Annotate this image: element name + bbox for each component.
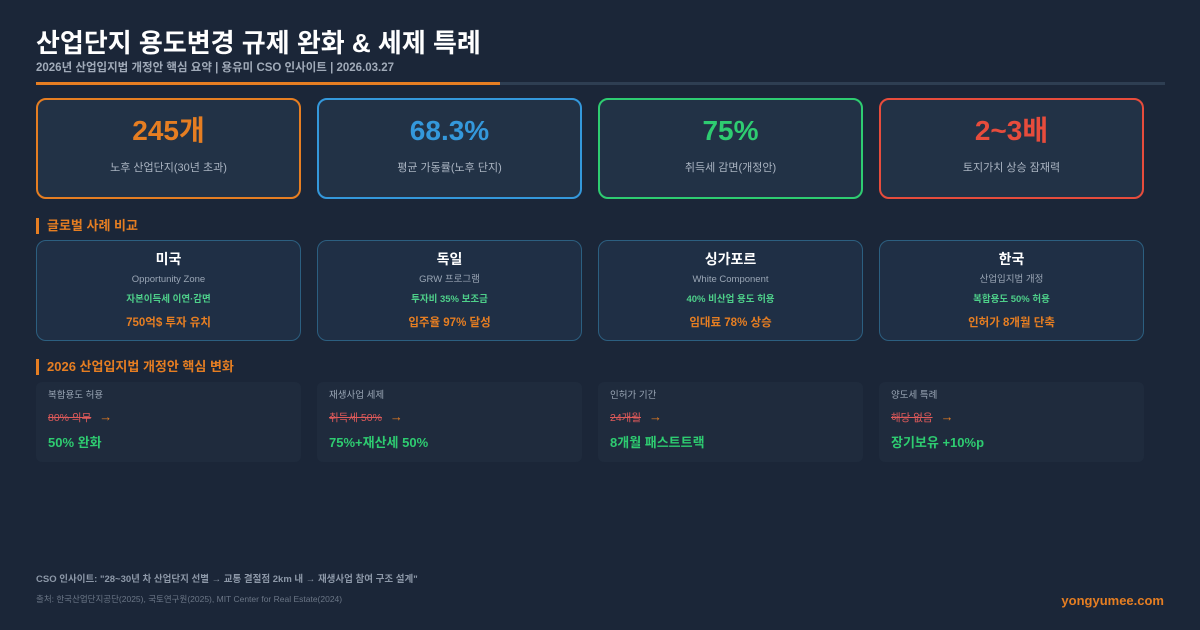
change 3: 24개월 → <box>610 409 662 424</box>
stat: 75: 취득세 감면(개정안) <box>685 162 776 174</box>
stat: 245 <box>36 98 301 199</box>
stat: 245: 245개 <box>132 115 205 146</box>
stat: 2~3: 토지가치 상승 잠재력 <box>963 162 1060 174</box>
heading: changes: 2026 산업입지법 개정안 핵심 변화 <box>47 359 234 374</box>
stat: 68.3: 평균 가동률(노후 단지) <box>397 162 502 174</box>
change 2 <box>317 382 582 462</box>
panel: Korea: 한국 <box>999 251 1024 267</box>
brand: yongyumee.com <box>1061 593 1164 608</box>
change 3 <box>598 382 863 462</box>
change 4: 해당 없음 → <box>891 409 954 424</box>
change 3: 인허가 기간 <box>610 390 656 401</box>
panel: Singapore: 40% 비산업 용도 허용 <box>686 294 775 305</box>
insight: CSO 인사이트: "28~30년 차 산업단지 선별 → 교통 결절점 2km 내 → 재생사업 참여 구조 설계" <box>36 574 418 585</box>
change 3: 8개월 패스트트랙 <box>610 435 705 450</box>
change 1 <box>36 382 301 462</box>
panel: Singapore <box>598 240 863 341</box>
panel: Korea: 산업입지법 개정 <box>980 274 1043 285</box>
change 1: 80% 의무 → <box>48 409 112 424</box>
stat: 68.3: 68.3% <box>410 115 489 146</box>
stat: 75: 75% <box>702 115 759 146</box>
panel: Germany: GRW 프로그램 <box>419 274 480 285</box>
change 2: 75%+재산세 50% <box>329 435 428 450</box>
stat: 2~3 <box>879 98 1144 199</box>
change 4: 양도세 특례 <box>891 390 937 401</box>
panel: USA: Opportunity Zone <box>132 274 205 285</box>
panel: USA: 750억$ 투자 유치 <box>126 317 211 329</box>
subtitle: 2026년 산업입지법 개정안 핵심 요약 | 용유미 CSO 인사이트 | 2026.03.27 <box>36 62 394 74</box>
panel: Germany: 독일 <box>437 251 462 267</box>
panel: USA: 자본이득세 이연·감면 <box>126 294 211 305</box>
change 1: 복합용도 허용 <box>48 390 103 401</box>
panel: Singapore: 싱가포르 <box>705 251 756 267</box>
source: 출처: 한국산업단지공단(2025), 국토연구원(2025), MIT Center for Real Estate(2024) <box>36 594 342 604</box>
stat: 245: 노후 산업단지(30년 초과) <box>110 162 227 174</box>
progress bar <box>36 82 1165 85</box>
panel: Korea: 복합용도 50% 허용 <box>973 294 1050 305</box>
change 2: 취득세 50% → <box>329 409 403 424</box>
panel: Germany: 입주율 97% 달성 <box>408 317 491 329</box>
panel: Korea <box>879 240 1144 341</box>
panel: Germany <box>317 240 582 341</box>
panel: Korea: 인허가 8개월 단축 <box>968 317 1055 329</box>
change 4: 장기보유 +10%p <box>891 435 984 450</box>
panel: Germany: 투자비 35% 보조금 <box>411 294 488 305</box>
stat: 75 <box>598 98 863 199</box>
stat: 68.3 <box>317 98 582 199</box>
panel: Singapore: 임대료 78% 상승 <box>689 317 772 329</box>
heading: global: 글로벌 사례 비교 <box>47 218 138 233</box>
change 4 <box>879 382 1144 462</box>
stat: 2~3: 2~3배 <box>975 115 1048 146</box>
title: 산업단지 용도변경 규제 완화 & 세제 특례 <box>36 28 481 58</box>
change 2: 재생사업 세제 <box>329 390 384 401</box>
panel: USA <box>36 240 301 341</box>
panel: USA: 미국 <box>156 251 181 267</box>
panel: Singapore: White Component <box>692 274 769 285</box>
change 1: 50% 완화 <box>48 435 102 450</box>
